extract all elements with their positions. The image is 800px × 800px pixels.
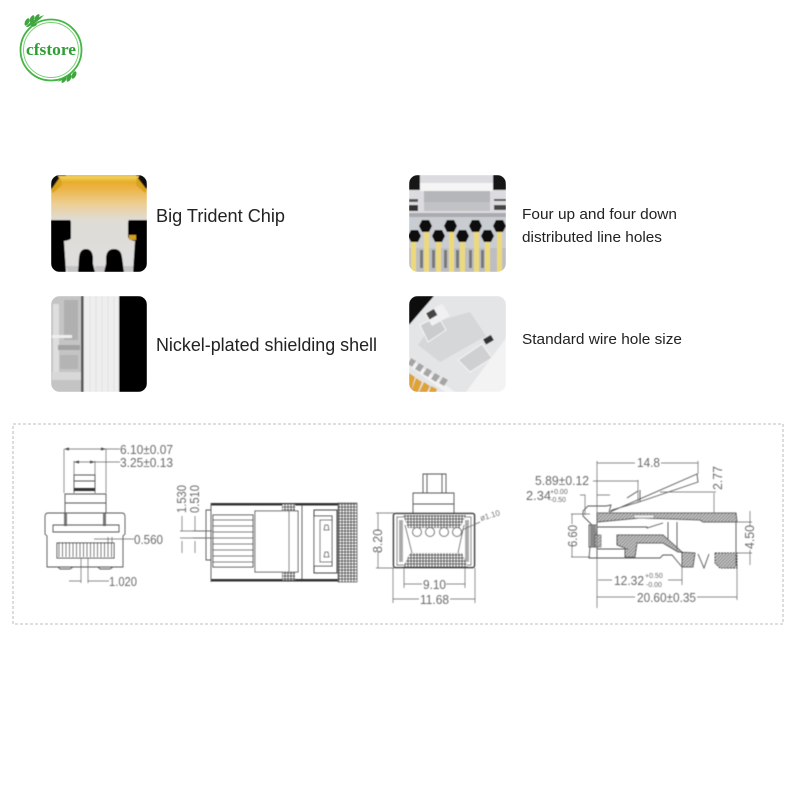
- dimension: 3.25: [74, 456, 173, 475]
- dimension: 1.530: [175, 485, 212, 553]
- dimension: 20.60: [597, 566, 737, 605]
- text: big trident chip: Big Trident Chip: [156, 206, 285, 226]
- dimension: 6.60: [566, 514, 590, 557]
- dimension: 8.20: 8.20: [371, 529, 385, 553]
- dimension: 0.560: [94, 533, 163, 547]
- dimension: 1.020: [69, 558, 137, 589]
- drawing: front view: [45, 443, 173, 589]
- dimension: 20.60: 20.60±0.35: [637, 591, 696, 605]
- text: standard wire hole size: Standard wire hole size: [522, 332, 682, 348]
- text: nickel-plated shielding shell: Nickel-plated shielding shell: [156, 335, 377, 355]
- text: four up and four down: distributed line holes: [522, 230, 662, 246]
- panel: nickel-plated shielding shell: [51, 296, 147, 392]
- dimension: 2.34: [526, 489, 610, 515]
- icon: top leaf sprig: [23, 13, 44, 27]
- icon: bottom leaf sprig: [57, 69, 78, 84]
- dimension: 5.89: [535, 474, 638, 502]
- dimension: 0.510: [188, 485, 212, 553]
- dimension: 14.8: [597, 456, 698, 608]
- drawing: side view: [526, 456, 757, 608]
- dimension: 0.560: 0.560: [134, 533, 163, 547]
- dimension: 12.32: -0.00: [646, 582, 662, 589]
- dimension: 1.020: 1.020: [109, 575, 137, 589]
- dimension: 0.510: 0.510: [188, 485, 202, 513]
- dimension: 5.89: 5.89±0.12: [535, 474, 589, 488]
- panel: four up and four down line holes: [408, 175, 506, 272]
- dimension: 6.60: 6.60: [566, 525, 580, 547]
- dimension: 12.32: +0.50: [645, 573, 663, 580]
- drawing: top view: [175, 485, 357, 582]
- panel: big trident chip: [51, 175, 147, 272]
- dimension: 1.10: ø1.10: [479, 508, 502, 523]
- dimension: 2.77: 2.77: [711, 466, 725, 490]
- dimension: 1.530: 1.530: [175, 485, 189, 513]
- text: four up and four down: [522, 207, 677, 246]
- dimension: 4.50: [736, 511, 757, 565]
- dimension: 6.10: [64, 443, 173, 493]
- dimension: 2.77: [660, 466, 725, 513]
- dimension: 2.34: 2.34: [526, 489, 551, 503]
- dimension: 2.34: -0.50: [550, 497, 566, 504]
- dimension: 12.32: [598, 565, 682, 589]
- panel: dimension drawings: [13, 424, 783, 624]
- dimension: 4.50: 4.50: [743, 525, 757, 549]
- dimension: 12.32: 12.32: [614, 574, 644, 588]
- dimension: 11.68: 11.68: [420, 593, 449, 607]
- drawing: end view: [371, 474, 502, 607]
- dimension: 2.34: +0.00: [550, 489, 568, 496]
- dimension: 6.10: 6.10±0.07: [120, 443, 173, 457]
- dimension: 9.10: 9.10: [423, 578, 446, 592]
- text: four up and four down: Four up and four down: [522, 207, 677, 223]
- panel: standard wire hole size: [408, 296, 506, 392]
- dimension: 14.8: 14.8: [637, 456, 660, 470]
- logo: cfstore: cfstore: [26, 40, 76, 59]
- logo: cfstore: [20, 13, 82, 84]
- dimension: 3.25: 3.25±0.13: [120, 456, 173, 470]
